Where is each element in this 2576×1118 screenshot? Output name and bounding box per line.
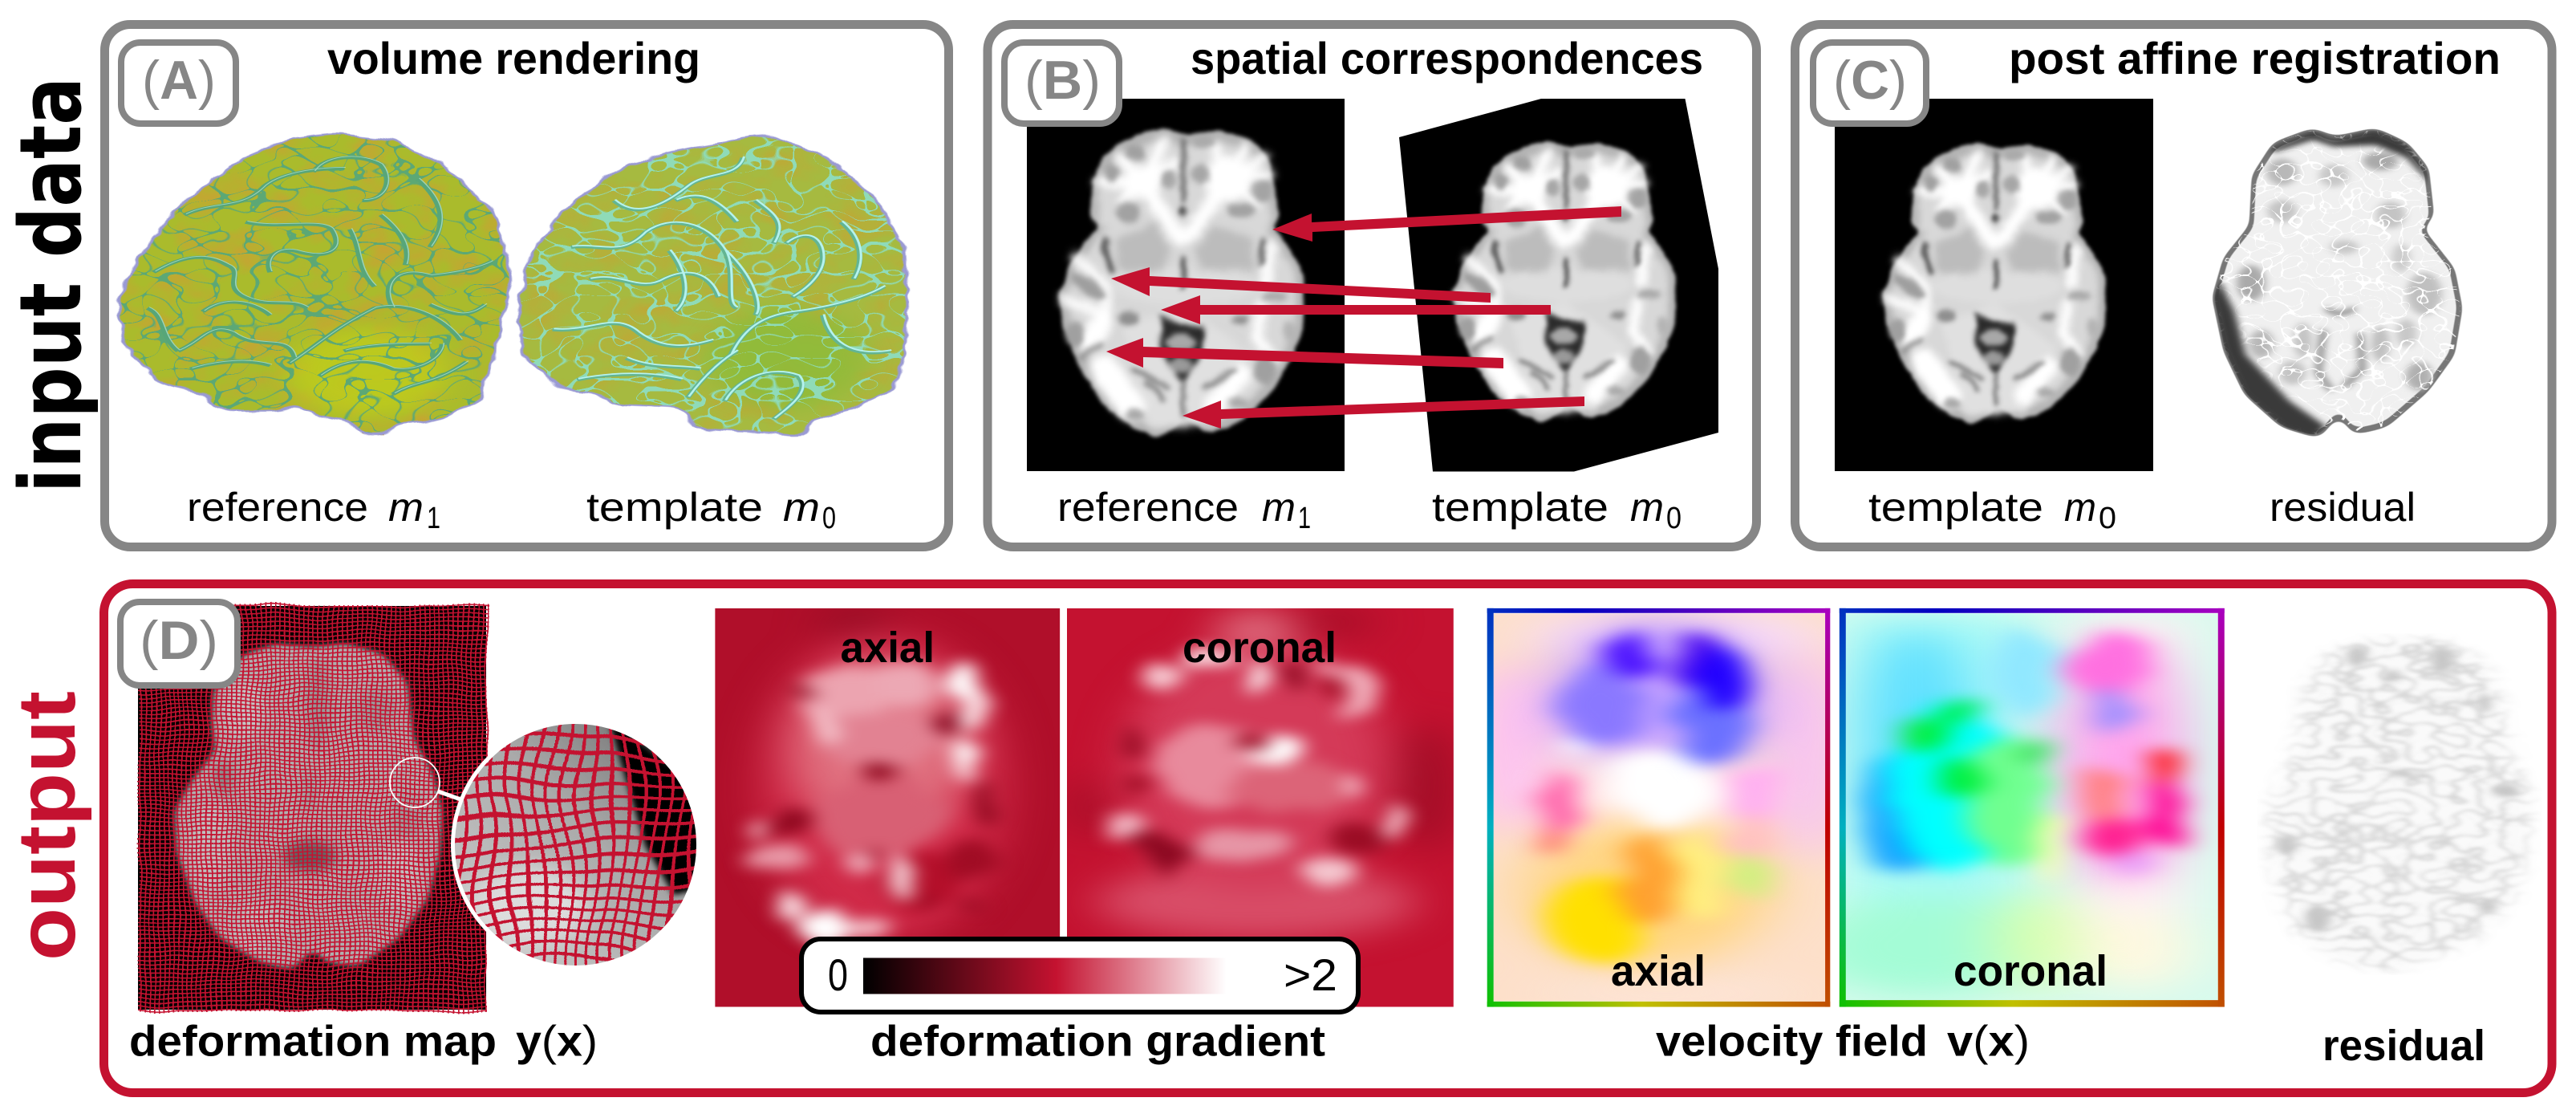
caption: reference m1: reference (1057, 485, 1239, 530)
tag A: (A) (142, 50, 216, 111)
caption: template m0: 0 (822, 502, 836, 535)
tag B: (B) (1024, 50, 1101, 111)
MRI slice: reference (1027, 99, 1345, 471)
colorbar: 0 (828, 949, 848, 1000)
caption: deformation map: y(x) (516, 1018, 598, 1066)
row title: output: output (1, 691, 92, 961)
panel D: output (104, 584, 2552, 1093)
axial label: axial (841, 624, 935, 672)
caption: reference m1: 1 (427, 502, 440, 535)
caption: residual: residual (2322, 1022, 2485, 1070)
coronal label: coronal (1953, 947, 2107, 995)
heatmap: deformation gradient coronal (1067, 608, 1454, 1007)
caption: deformation map: deformation map (129, 1018, 497, 1066)
brain rendering: template (516, 129, 909, 441)
caption: template m0: 0 (1666, 502, 1681, 535)
tag B (1004, 43, 1119, 124)
panel C: post affine registration (1795, 24, 2552, 547)
caption: template m0: m (783, 485, 820, 530)
residual image (2209, 125, 2463, 441)
caption: template m0 (1868, 485, 2116, 535)
caption: template m0: template (586, 485, 763, 530)
caption: reference m1: reference (187, 485, 368, 530)
frame (1840, 608, 2225, 1007)
velocity field axial (1475, 608, 1841, 1007)
heatmap: deformation gradient axial (715, 608, 1060, 1007)
heading: post affine registration (2009, 33, 2501, 83)
heading: spatial correspondences (1191, 33, 1703, 83)
tag A (121, 43, 236, 124)
caption: template m0: 0 (2099, 502, 2116, 535)
caption: velocity field: velocity field (1656, 1018, 1928, 1066)
heading: volume rendering (327, 33, 700, 83)
caption: template m0 (1432, 485, 1681, 535)
coronal label: coronal (1183, 624, 1337, 672)
caption: reference m1 (187, 485, 440, 535)
caption: template m0: m (2064, 485, 2096, 530)
caption: template m0: template (1868, 485, 2043, 530)
MRI slice: affine template (1399, 99, 1718, 472)
caption: reference m1: m (1262, 485, 1296, 530)
caption: reference m1: 1 (1298, 502, 1311, 535)
panel B: spatial correspondences (988, 24, 1757, 547)
tag C (1813, 43, 1926, 124)
correspondence arrows (1106, 206, 1621, 429)
brain rendering: reference (111, 129, 522, 441)
axial label: axial (1611, 947, 1706, 995)
caption: template m0: m (1630, 485, 1664, 530)
caption: reference m1 (1057, 485, 1311, 535)
output residual image (2258, 633, 2542, 975)
colorbar: >2 (1284, 949, 1337, 1000)
MRI slice: template (1835, 99, 2153, 471)
caption: deformation gradient: deformation gradient (870, 1018, 1325, 1066)
caption: template m0: template (1432, 485, 1608, 530)
row title: input data: input data (2, 77, 100, 493)
caption: reference m1: m (388, 485, 424, 530)
tag D (120, 602, 237, 685)
caption: residual: residual (2270, 485, 2416, 530)
tag C: (C) (1833, 50, 1907, 111)
velocity field coronal (1802, 608, 2225, 1007)
panel A: volume rendering (104, 24, 948, 547)
caption: template m0 (586, 485, 836, 535)
caption: velocity field: v(x) (1947, 1018, 2030, 1066)
magnified mesh inset (389, 724, 696, 966)
deformation map mesh (138, 604, 488, 1012)
frame (1487, 608, 1830, 1007)
tag D: (D) (140, 610, 218, 671)
colorbar (801, 939, 1358, 1012)
